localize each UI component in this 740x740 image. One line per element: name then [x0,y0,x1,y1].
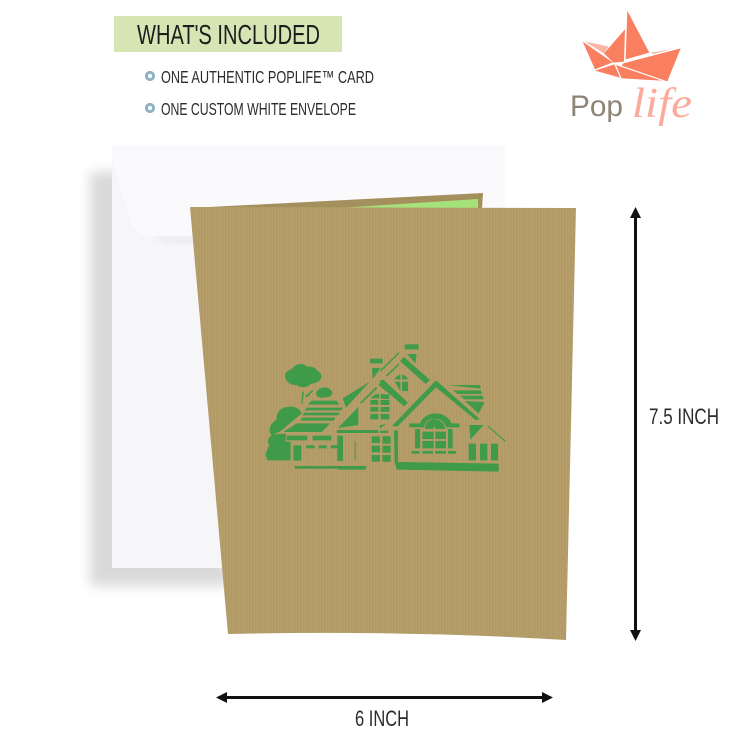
chimney [405,344,419,349]
arrow: vertical [630,207,641,641]
list: included items [146,67,374,119]
arrow: horizontal [216,692,553,703]
item: one authentic poplife card: ONE AUTHENTIC POPLIFE™ CARD [161,67,374,87]
label: 7.5 inch: 7.5 INCH [649,404,719,429]
greeting card [190,193,576,640]
wordmark: pop: Pop [570,90,623,123]
right roof stripes [447,385,481,389]
base band [394,430,499,472]
dimension: height [630,207,719,641]
tree [285,364,321,387]
logo: poplife [570,11,692,127]
roof slope [400,357,430,384]
dormer window [395,375,400,380]
green inner sheet [338,199,478,208]
left part of house [266,359,391,470]
chimney [370,359,383,363]
heading: what's included: WHAT'S INCLUDED [137,19,320,50]
small gable [469,425,484,440]
upper window [370,394,379,399]
card front [190,207,576,640]
item: one custom white envelope: ONE CUSTOM WHITE ENVELOPE [161,99,356,119]
card back panel [190,193,483,209]
label: 6 inch: 6 INCH [355,706,409,731]
envelope [112,145,505,568]
dimension: width [216,692,553,731]
main gable [338,407,358,428]
envelope shadow [90,172,230,586]
left stub [380,431,388,433]
heading: what's included [114,16,342,52]
main gable [392,380,480,427]
item: one authentic poplife card [146,67,374,87]
upper roof slope [379,380,391,395]
icon: origami boat [583,11,681,81]
roof stripes [308,401,339,405]
house cutout [266,344,506,472]
fascia and windows [287,436,307,440]
lower window [372,436,380,443]
bush [270,407,302,435]
arched window [409,413,459,427]
item: one custom white envelope [146,99,356,119]
wordmark: life: life [632,81,692,127]
envelope flap [112,145,505,236]
right part of house [380,344,506,472]
